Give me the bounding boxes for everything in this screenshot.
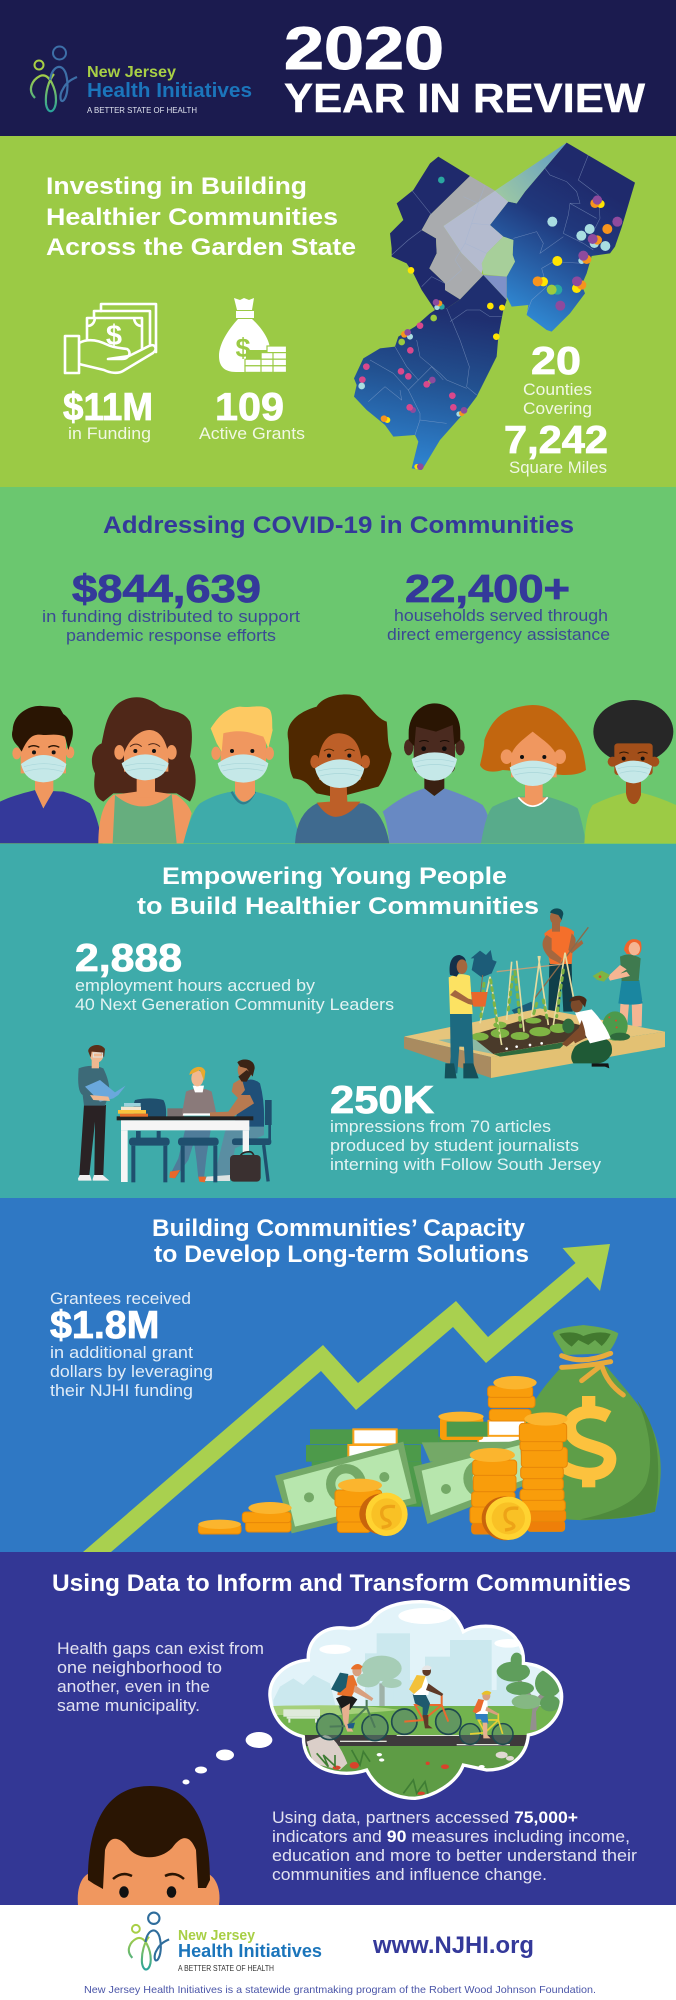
small coin stacks xyxy=(198,1502,292,1534)
text: health gaps: another, even in the xyxy=(57,1678,210,1696)
stat: impressions: impressions from 70 articles xyxy=(330,1118,551,1136)
woman with pot xyxy=(445,950,497,1078)
dollar bills xyxy=(275,1438,530,1533)
header logo: Health Initiatives xyxy=(87,80,252,102)
thought bubbles xyxy=(182,1732,272,1784)
stat: additional grant dollars: in additional grant xyxy=(50,1344,193,1362)
map of New Jersey xyxy=(354,143,635,470)
icon: hand holding money: $ xyxy=(106,320,122,352)
person 2 xyxy=(92,697,196,843)
footer website: www.NJHI.org xyxy=(372,1932,534,1959)
footer logo: A BETTER STATE OF HEALTH xyxy=(178,1964,274,1973)
title: YEAR IN REVIEW xyxy=(284,75,645,121)
heading: empowering young people: to Build Healthier Communities xyxy=(137,893,539,920)
big coin right xyxy=(482,1496,531,1540)
stat: employment hours: employment hours accrued by xyxy=(75,977,316,995)
green money bag xyxy=(520,1325,661,1520)
stat: employment hours xyxy=(75,937,394,1014)
woman gardener right xyxy=(593,939,643,1027)
arrow: rising growth xyxy=(83,1244,610,1552)
person 3 xyxy=(183,706,301,843)
illustration: masked people, left xyxy=(0,694,392,843)
person 5 xyxy=(383,703,488,843)
stat: additional grant dollars: $1.8M xyxy=(50,1304,160,1347)
coin stack right mid xyxy=(470,1448,517,1534)
laptop xyxy=(167,1108,184,1118)
stat: households: 22,400+ xyxy=(405,568,570,611)
stat: additional grant dollars: Grantees received xyxy=(50,1290,191,1308)
raised garden bed xyxy=(404,1008,665,1078)
footer logo: New Jersey xyxy=(178,1927,256,1944)
cyclist 3 xyxy=(460,1691,513,1744)
stat: covid funding: pandemic response efforts xyxy=(66,627,276,645)
heading: building capacity xyxy=(152,1215,529,1268)
stat: funding: in Funding xyxy=(68,425,151,443)
tall back coin stack xyxy=(488,1376,537,1421)
stat: covid funding: $844,639 xyxy=(72,568,261,611)
kneeling man xyxy=(562,996,612,1068)
person 4 xyxy=(288,694,392,843)
stat: covid funding xyxy=(42,568,300,645)
stat: counties and square miles: Counties xyxy=(523,381,592,399)
cash stacks xyxy=(306,1429,522,1507)
footer note: New Jersey Health Initiatives is a statewide grantmaking program of the Robert Wood Johnson Foundation. xyxy=(84,1984,596,1996)
cyclist 2 xyxy=(392,1665,461,1734)
coin stack centre xyxy=(335,1479,382,1532)
person 6 xyxy=(480,705,586,843)
stat: counties and square miles: 7,242 xyxy=(504,419,608,462)
stat: additional grant dollars: dollars by leveraging xyxy=(50,1363,213,1381)
text: health gaps: one neighborhood to xyxy=(57,1659,222,1677)
books xyxy=(118,1103,148,1117)
text: using data partners: communities and influence change. xyxy=(272,1866,547,1884)
heading: investing: Healthier Communities xyxy=(46,204,338,231)
stat: covid funding: in funding distributed to support xyxy=(42,608,300,626)
stat: additional grant dollars: their NJHI funding xyxy=(50,1382,193,1400)
text: using data partners xyxy=(272,1809,638,1884)
bag xyxy=(230,1152,261,1182)
footer logo xyxy=(129,1913,322,1973)
trellis and vines xyxy=(480,953,573,1045)
big coin centre xyxy=(359,1493,408,1536)
stat: impressions xyxy=(330,1079,602,1174)
illustration: study group xyxy=(78,1045,272,1182)
stat: households: direct emergency assistance xyxy=(387,626,610,644)
stat: active grants: 109 xyxy=(215,386,284,429)
table xyxy=(117,1116,253,1182)
header logo: A BETTER STATE OF HEALTH xyxy=(87,105,197,115)
text: using data partners: Using data, partners accessed 75,000+ xyxy=(272,1809,578,1827)
stat: funding: $11M xyxy=(63,386,153,429)
illustration: money bag, cash and coins xyxy=(198,1325,661,1540)
stat: additional grant dollars xyxy=(50,1290,213,1400)
heading: building capacity: Building Communities’ Capacity xyxy=(152,1215,526,1242)
text: using data partners: indicators and 90 measures including income, xyxy=(272,1828,630,1846)
text: health gaps xyxy=(57,1640,264,1715)
stat: counties and square miles: Covering xyxy=(523,400,592,418)
heading: investing: Investing in Building xyxy=(46,173,307,200)
illustration: community garden xyxy=(404,908,665,1078)
coin stack right tall xyxy=(519,1412,568,1531)
heading: investing: Across the Garden State xyxy=(46,234,356,261)
heading: empowering young people xyxy=(137,863,539,920)
text: health gaps: Health gaps can exist from xyxy=(57,1640,264,1658)
woman at table xyxy=(169,1067,217,1182)
title xyxy=(284,15,645,121)
stat: employment hours: 40 Next Generation Community Leaders xyxy=(75,996,394,1014)
cyclist 1 xyxy=(317,1664,388,1741)
heading: covid: Addressing COVID-19 in Communities xyxy=(103,512,574,539)
back chair xyxy=(134,1098,166,1117)
icon: hand holding money xyxy=(65,304,156,373)
stat: counties and square miles: 20 xyxy=(531,340,581,383)
standing person xyxy=(78,1045,126,1181)
heading: investing xyxy=(46,173,356,261)
stat: employment hours: 2,888 xyxy=(75,937,182,980)
heading: empowering young people: Empowering Young People xyxy=(162,863,507,890)
illustration: thinking head xyxy=(78,1786,220,1905)
stat: impressions: produced by student journalists xyxy=(330,1137,579,1155)
chairs xyxy=(129,1125,271,1182)
heading: building capacity: to Develop Long-term Solutions xyxy=(154,1241,529,1268)
stat: counties and square miles: Square Miles xyxy=(509,459,607,477)
person 7 xyxy=(584,700,676,843)
header logo: New Jersey xyxy=(87,64,176,81)
person 1 xyxy=(0,706,103,843)
bench xyxy=(283,1709,320,1723)
icon: money bag xyxy=(219,298,286,372)
stat: impressions: interning with Follow South Jersey xyxy=(330,1156,602,1174)
large tree xyxy=(497,1653,562,1730)
man with rake xyxy=(512,908,588,1017)
header logo xyxy=(31,46,252,115)
text: using data partners: education and more to better understand their xyxy=(272,1847,638,1865)
stat: households xyxy=(387,568,610,644)
title: 2020 xyxy=(284,15,444,82)
heading: using data: Using Data to Inform and Transform Communities xyxy=(52,1570,631,1597)
stat: impressions: 250K xyxy=(330,1079,434,1122)
stat: active grants: Active Grants xyxy=(199,425,305,443)
stat: households: households served through xyxy=(394,607,608,625)
thought cloud: cyclists in a park xyxy=(260,1600,570,1803)
stat: active grants xyxy=(199,386,305,443)
stat: counties and square miles xyxy=(504,340,608,477)
man at table xyxy=(205,1060,264,1181)
illustration: masked people, right xyxy=(383,700,676,843)
footer logo: Health Initiatives xyxy=(178,1941,322,1961)
icon: money bag: $ xyxy=(235,333,251,363)
plant bush xyxy=(562,1011,630,1041)
back coin stack xyxy=(438,1412,525,1440)
distant tree xyxy=(357,1656,402,1707)
text: health gaps: same municipality. xyxy=(57,1697,200,1715)
